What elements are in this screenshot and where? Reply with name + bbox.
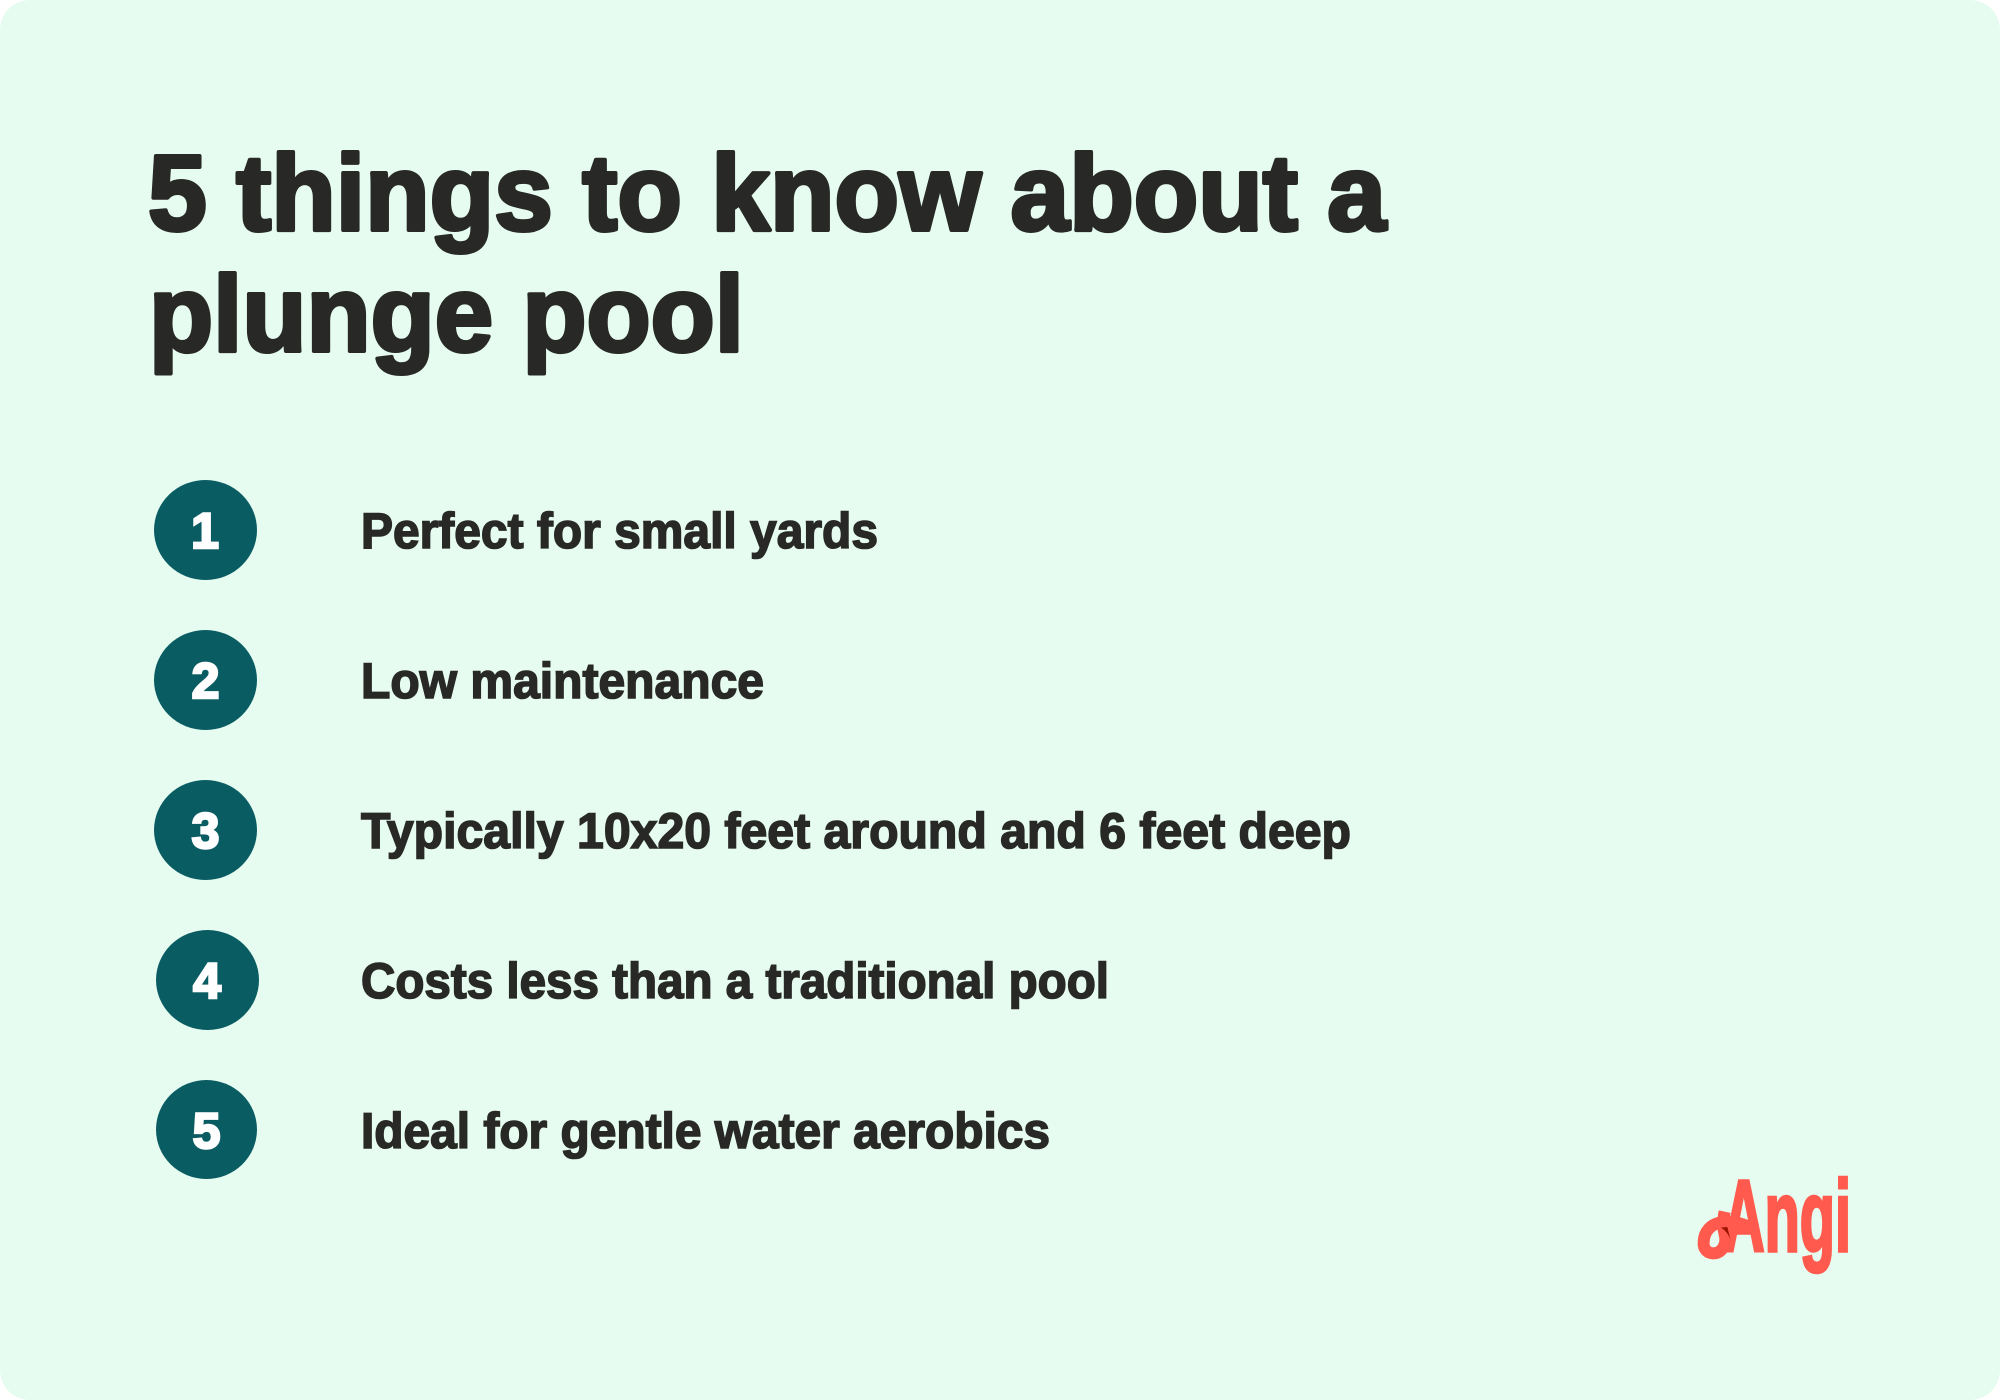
logo loop bbox=[1704, 1212, 1750, 1253]
list item 1 bbox=[154, 480, 878, 580]
list item 4 bbox=[156, 930, 1109, 1030]
title bbox=[148, 132, 1387, 374]
number badge 1 bbox=[154, 480, 257, 580]
number badge 2: 2 bbox=[192, 653, 219, 709]
number badge 1: 1 bbox=[191, 503, 219, 559]
number badge 4: 4 bbox=[193, 953, 221, 1009]
item text 1: Perfect for small yards bbox=[361, 503, 878, 559]
number badge 4 bbox=[156, 930, 259, 1030]
list item 5 bbox=[156, 1080, 1050, 1179]
number badge 2 bbox=[154, 630, 257, 730]
list item 2 bbox=[154, 630, 764, 730]
list item 3 bbox=[154, 780, 1351, 880]
title: 5 things to know about a bbox=[148, 132, 1387, 253]
item text 5: Ideal for gentle water aerobics bbox=[361, 1103, 1050, 1159]
item text 2: Low maintenance bbox=[361, 653, 764, 709]
item text 3: Typically 10x20 feet around and 6 feet deep bbox=[361, 803, 1351, 859]
number badge 3: 3 bbox=[192, 803, 219, 859]
number badge 5: 5 bbox=[193, 1103, 220, 1159]
title: plunge pool bbox=[149, 253, 744, 374]
item text 4: Costs less than a traditional pool bbox=[361, 953, 1109, 1009]
logo: Angi: Angi bbox=[1723, 1161, 1851, 1273]
logo: Angi bbox=[1704, 1161, 1851, 1273]
number badge 5 bbox=[156, 1080, 257, 1179]
number badge 3 bbox=[154, 780, 257, 880]
